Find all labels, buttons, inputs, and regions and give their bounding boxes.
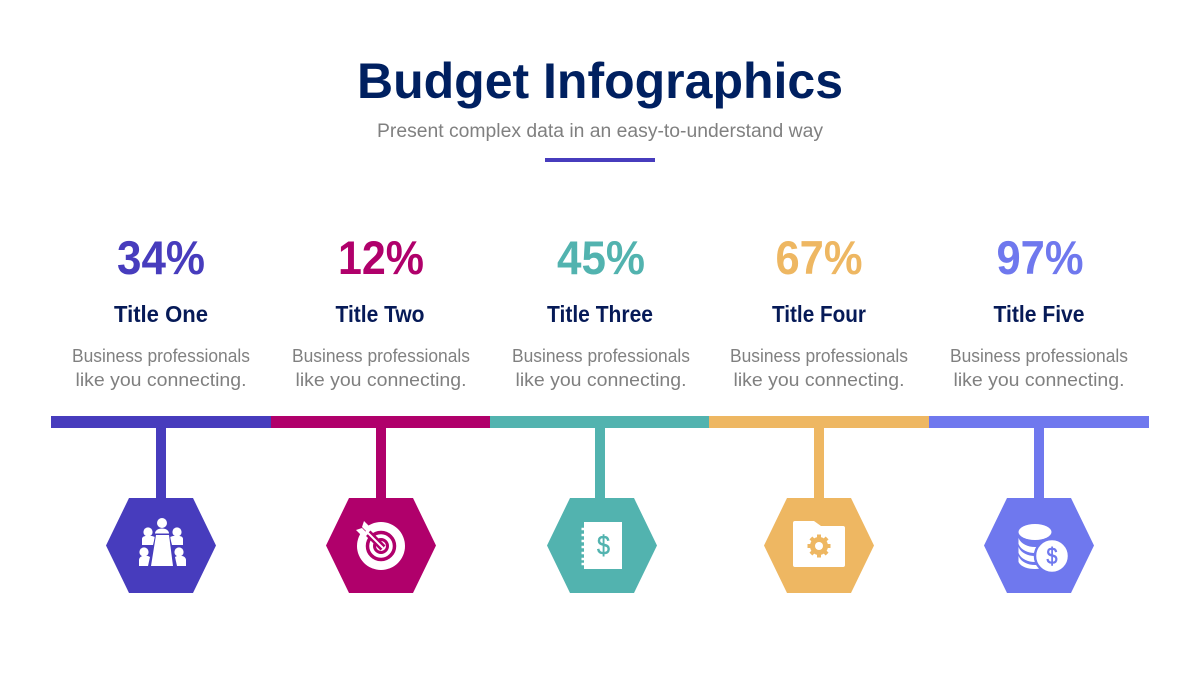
percentage 67%: 67% (776, 231, 862, 284)
description: title five: Business professionals (950, 346, 1128, 366)
description: title two: Business professionals (292, 346, 470, 366)
connector two (376, 428, 386, 500)
heading: title one: Title One (114, 301, 208, 327)
description: title three: like you connecting. (516, 370, 686, 390)
description: title four: Business professionals (730, 346, 908, 366)
description: title one: Business professionals (72, 346, 250, 366)
description: title two: like you connecting. (296, 370, 466, 390)
percentage 45%: 45% (557, 231, 645, 284)
timeline segment two (271, 416, 490, 428)
description: title one (72, 346, 250, 390)
description: title four (730, 346, 908, 390)
timeline segment one (51, 416, 271, 428)
heading: title three: Title Three (547, 301, 653, 327)
timeline segment five (929, 416, 1149, 428)
description: title five: like you connecting. (954, 370, 1124, 390)
connector four (814, 428, 824, 500)
panel: title three (490, 231, 709, 593)
hexagon four (764, 498, 874, 593)
description: title three: Business professionals (512, 346, 690, 366)
heading: title two: Title Two (336, 301, 424, 327)
hexagon one (106, 498, 216, 593)
title underline (545, 158, 655, 162)
panel: title one (51, 231, 271, 593)
description: title three (512, 346, 690, 390)
icon: dollar notebook: $ (597, 530, 610, 560)
hexagon two (326, 498, 436, 593)
panel: title two (271, 231, 490, 593)
icon: target with arrow (356, 521, 405, 570)
hexagon three (547, 498, 657, 593)
connector three (595, 428, 605, 500)
timeline segment four (709, 416, 929, 428)
connector one (156, 428, 166, 500)
description: title one: like you connecting. (76, 370, 246, 390)
connector five (1034, 428, 1044, 500)
icon: coins with dollar: $ (1046, 543, 1058, 569)
icon: folder with gear (793, 521, 845, 567)
percentage 34%: 34% (117, 231, 205, 284)
timeline segment three (490, 416, 709, 428)
icon: meeting table (139, 518, 186, 566)
icon: dollar notebook (582, 522, 622, 569)
title: Budget Infographics (357, 53, 843, 109)
heading: title five: Title Five (994, 301, 1084, 327)
hexagon five (984, 498, 1094, 593)
panel: title four (709, 231, 929, 593)
description: title five (950, 346, 1128, 390)
description: title two (292, 346, 470, 390)
icon: coins with dollar (1018, 524, 1069, 573)
description: title four: like you connecting. (734, 370, 904, 390)
heading: title four: Title Four (772, 301, 866, 327)
percentage 97%: 97% (996, 231, 1084, 284)
panel: title five (929, 231, 1149, 593)
subtitle: Present complex data in an easy-to-understand way (377, 121, 823, 142)
percentage 12%: 12% (338, 231, 424, 284)
